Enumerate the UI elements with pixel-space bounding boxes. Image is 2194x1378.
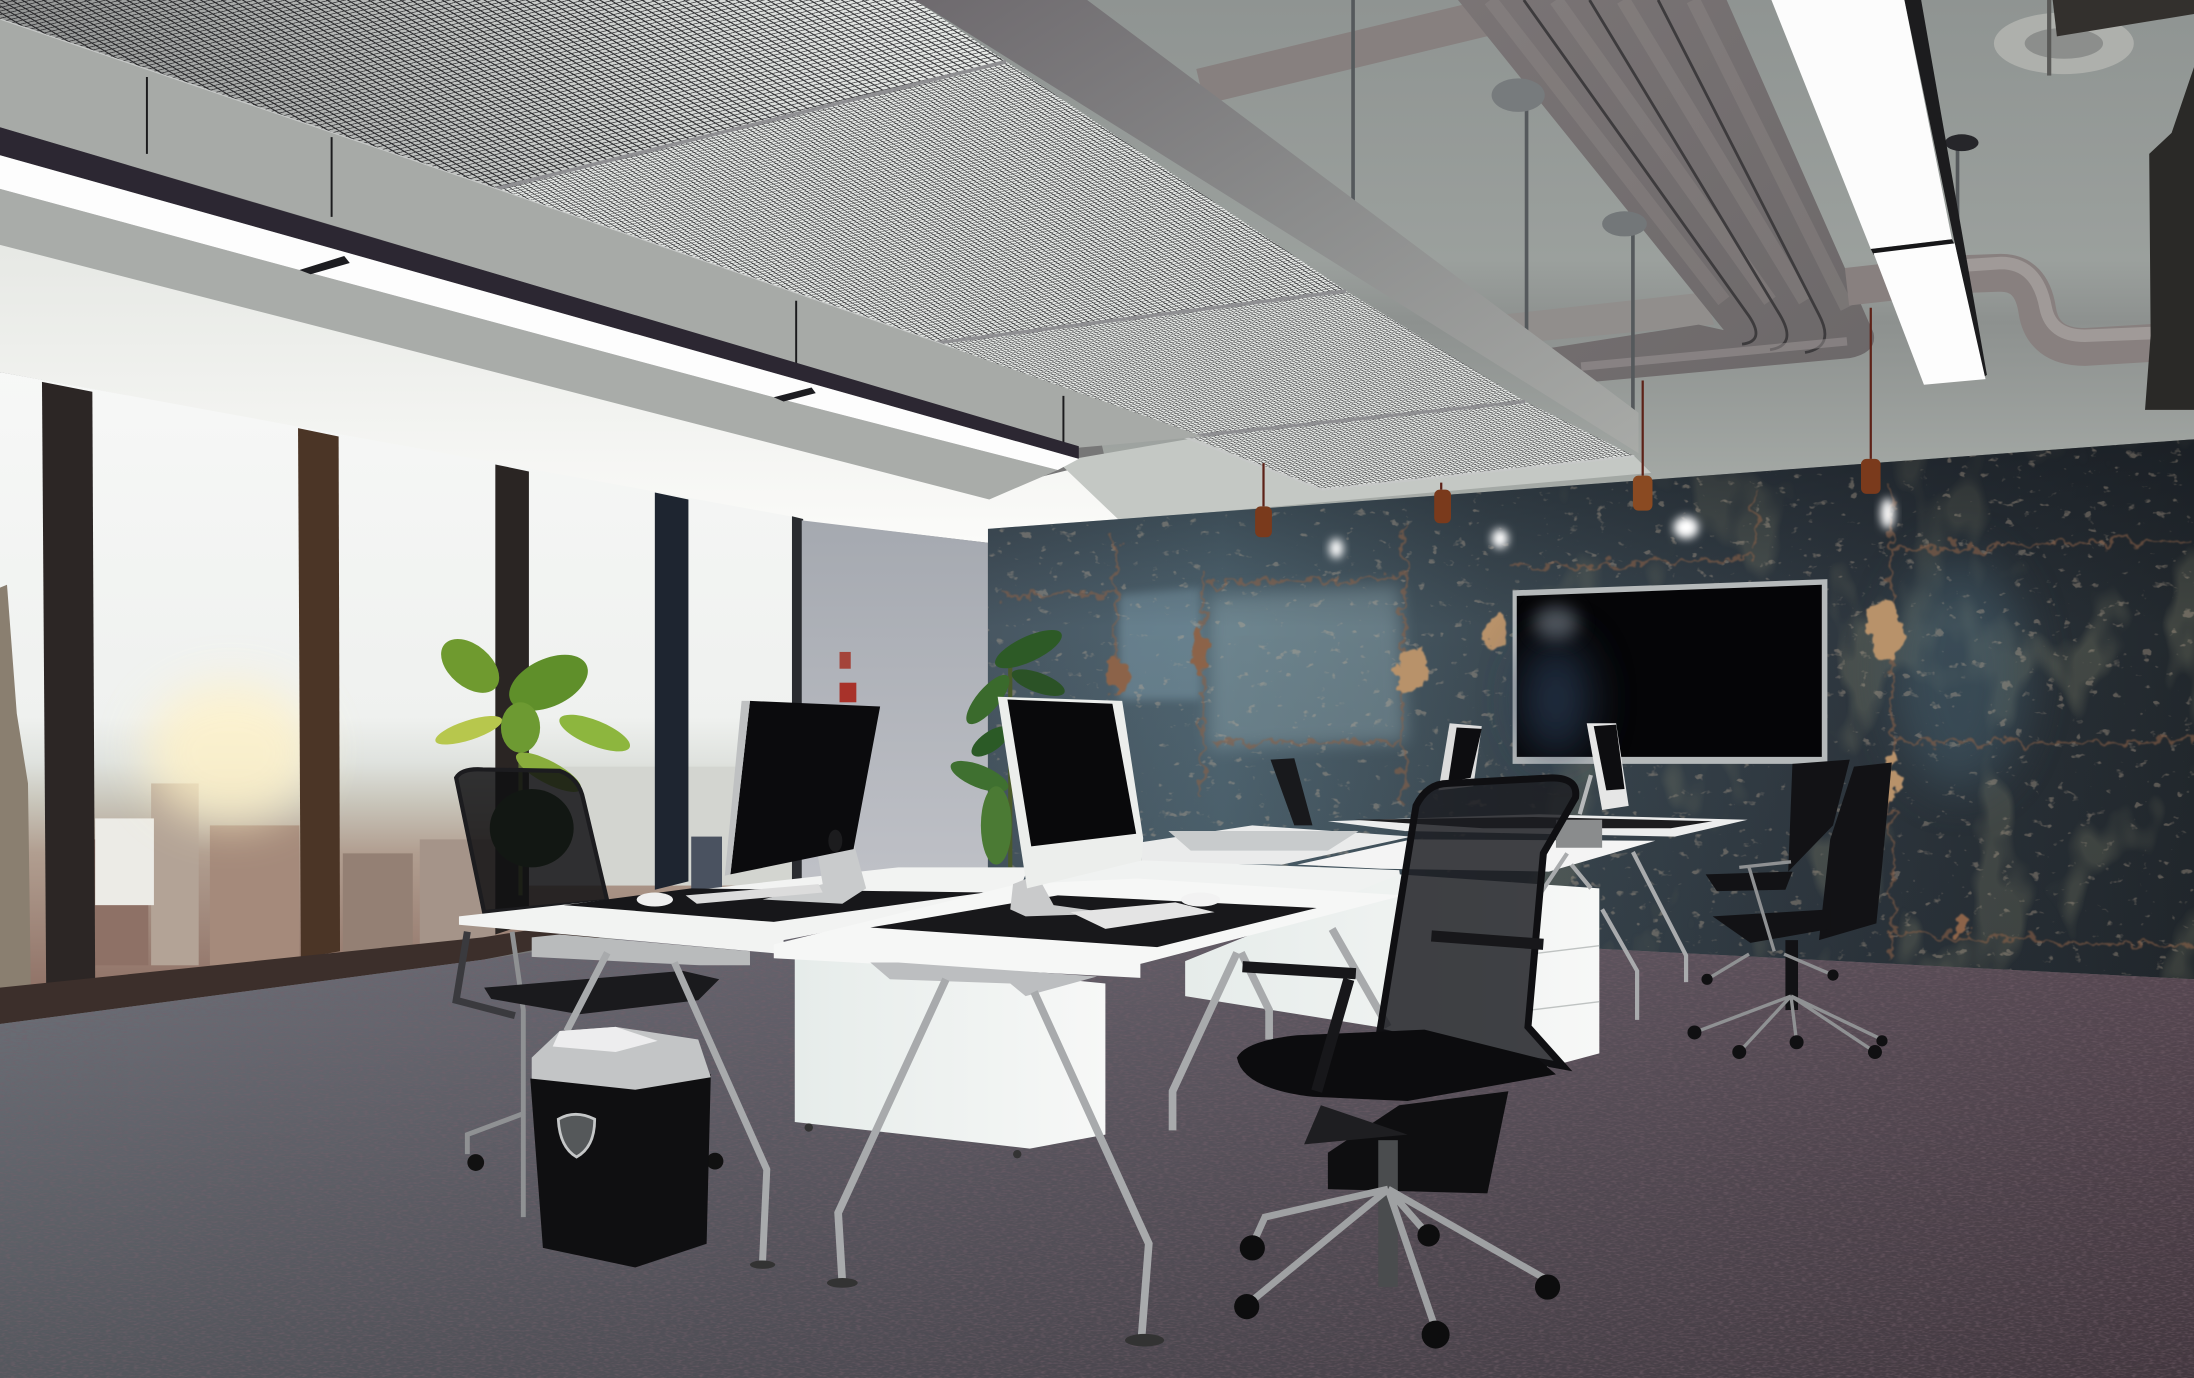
chair base — [467, 932, 523, 1217]
dark desk mat — [564, 888, 985, 922]
chair bag behind — [1328, 1091, 1508, 1193]
window sill — [0, 916, 616, 1024]
chair seat — [484, 971, 719, 1014]
grey band below light — [0, 189, 1077, 499]
rust patches — [1110, 602, 1969, 933]
seat — [1237, 1030, 1556, 1101]
shredder — [530, 1027, 711, 1267]
rusted metal wall — [979, 434, 2194, 986]
chair base — [1378, 1140, 1398, 1287]
back desk legs — [1539, 852, 1686, 1020]
back desk right — [1297, 839, 1655, 872]
white soffit above windows — [0, 238, 1399, 543]
front monitor — [998, 697, 1220, 929]
rust speckle — [979, 434, 2194, 986]
dark desk mat — [870, 895, 1317, 947]
chair arm — [456, 932, 515, 1016]
left monitor — [637, 701, 880, 907]
mesh back — [1380, 778, 1576, 1066]
front desk — [774, 879, 1403, 1347]
city buildings — [92, 783, 495, 965]
front office chair — [1234, 778, 1576, 1349]
olive mottling — [1525, 434, 2194, 986]
plant by window — [431, 628, 634, 895]
fire alarm sign — [840, 652, 856, 702]
wall light pools — [1329, 498, 1895, 558]
ceiling: exposed upper ceiling — [896, 0, 2194, 520]
back monitor 1 — [1438, 723, 1482, 790]
sun glare — [144, 683, 318, 823]
middle mesh section — [495, 62, 1346, 343]
back monitor 2 — [1580, 775, 1591, 814]
mesh ceiling panel — [0, 0, 1634, 490]
desk with dark mat — [1328, 814, 1748, 837]
pale wall under mesh — [1058, 436, 1651, 520]
grey beam below mesh — [0, 20, 1203, 448]
suspended rods and discs — [1353, 0, 1979, 417]
linear ceiling light, right — [1771, 0, 1987, 385]
pipe seams — [1524, 0, 1825, 353]
rolled plans — [1168, 831, 1359, 851]
far chair — [1271, 758, 1312, 825]
window mullions — [42, 382, 803, 986]
right duct — [1847, 263, 2155, 347]
front desk legs — [838, 929, 1388, 1335]
ceiling vent and bracket — [1994, 0, 2194, 410]
legs — [567, 953, 767, 1260]
carpet floor — [0, 909, 2194, 1378]
thick ceiling beam — [915, 0, 1639, 453]
seat mechanism — [1304, 1105, 1408, 1144]
back desk cabinet — [1185, 874, 1599, 1070]
front white cabinet — [795, 953, 1105, 1158]
shredder badge — [558, 1114, 595, 1157]
linear ceiling light, left — [0, 77, 1079, 470]
skyscraper — [0, 585, 31, 990]
distant water — [529, 767, 795, 886]
mesh seams — [495, 62, 1525, 436]
keyboard and mouse — [1070, 902, 1215, 929]
bundled ceiling pipes — [1458, 0, 1874, 383]
upper mesh section — [0, 0, 1006, 189]
far building through window — [691, 837, 722, 893]
back desks — [1028, 723, 1748, 1070]
window view: city skyline — [0, 364, 805, 1007]
back desk with plans — [1142, 825, 1412, 865]
black housing — [0, 127, 1079, 459]
chair mesh back — [456, 769, 607, 912]
rust seams — [1000, 484, 2194, 956]
horizontal back pipes — [1201, 17, 1714, 343]
frame bar — [532, 935, 750, 965]
copper spot lights — [1255, 308, 1881, 537]
wall-mounted TV — [1513, 579, 1827, 764]
armrests — [1243, 936, 1543, 1091]
white furniture behind front desk — [1028, 860, 1403, 898]
left chair — [456, 769, 723, 1217]
side wall — [802, 520, 988, 888]
back right chairs — [1687, 760, 1892, 1059]
plant by side wall — [947, 622, 1068, 867]
left desk — [459, 867, 1028, 1269]
frame bar — [870, 963, 1097, 996]
blue steel plates — [1119, 588, 1201, 699]
stacked books — [1556, 820, 1602, 848]
keyboard and mouse — [686, 884, 823, 904]
lit diffuser — [0, 155, 1079, 470]
lower mesh section — [937, 291, 1525, 436]
